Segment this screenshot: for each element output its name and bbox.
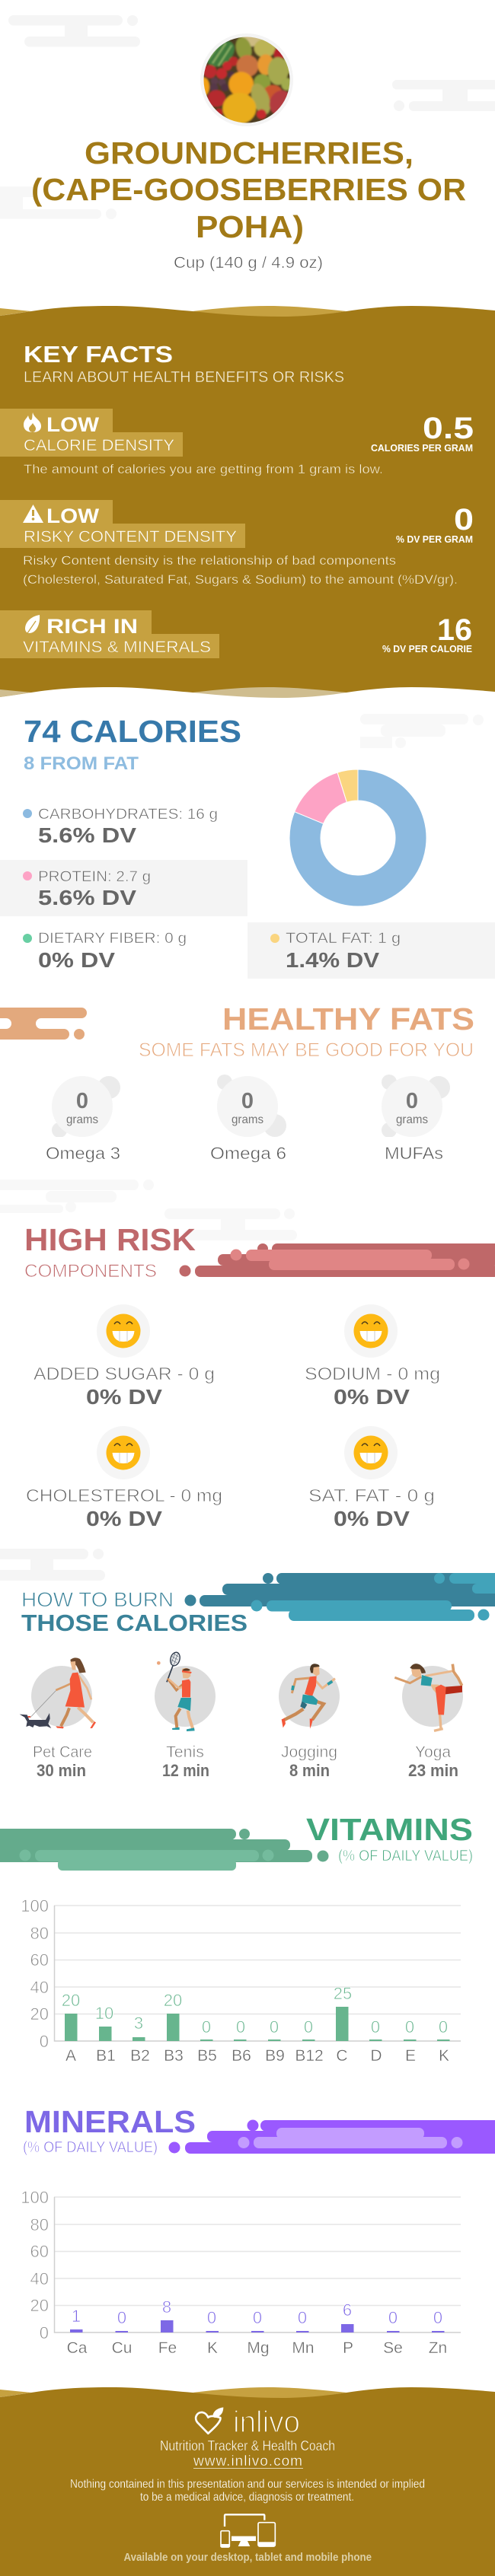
stat: omega 3	[46, 1076, 120, 1163]
bar chart: vitamins: 0	[439, 2017, 448, 2036]
bar chart: minerals: K	[207, 2339, 218, 2357]
item: saturated fat	[308, 1426, 435, 1530]
bar chart: vitamins: B2	[130, 2047, 150, 2065]
activity: jogging: 8 min	[289, 1761, 330, 1780]
serving size: Cup (140 g / 4.9 oz)	[174, 254, 323, 272]
bar chart: minerals: 6	[343, 2301, 352, 2320]
item: cholesterol	[26, 1426, 222, 1530]
donut chart	[289, 769, 426, 906]
bar chart: minerals: 0	[388, 2308, 398, 2327]
title: POHA)	[196, 209, 304, 244]
bar chart: vitamins: B1	[96, 2047, 116, 2065]
icon: tennis player	[157, 1651, 195, 1731]
bar chart: vitamins: 60	[30, 1950, 49, 1969]
fact: rich in vitamins and minerals: % DV PER CALORIE	[382, 643, 472, 654]
bar chart: minerals: 0	[207, 2308, 216, 2327]
bar chart: vitamins: 0	[202, 2017, 211, 2036]
fact: rich in vitamins and minerals	[0, 610, 472, 658]
icon: grinning face	[353, 1435, 388, 1470]
fact: risky content density: % DV PER GRAM	[396, 533, 473, 545]
fact: calorie density: LOW	[46, 413, 100, 436]
nutrient: total fat	[248, 922, 495, 979]
nutrient: carbohydrates	[23, 807, 218, 847]
activity: pet care	[20, 1657, 96, 1780]
bar chart: minerals: 8	[162, 2297, 171, 2316]
activity: tennis	[155, 1651, 216, 1780]
stat: mufas: MUFAs	[385, 1144, 443, 1163]
fact: calorie density: 0.5	[423, 412, 474, 445]
disclaimer: to be a medical advice, diagnosis or treatment.	[140, 2491, 354, 2504]
heading: those calories: THOSE CALORIES	[21, 1610, 248, 1636]
bar chart: minerals: P	[343, 2339, 353, 2357]
icon: yoga pose	[394, 1664, 462, 1731]
heading: key facts: KEY FACTS	[24, 341, 173, 368]
activity: jogging: Jogging	[281, 1743, 337, 1761]
stat: omega 3: Omega 3	[46, 1144, 120, 1163]
bar chart: vitamins	[21, 1896, 461, 2065]
icon: grinning face	[353, 1313, 388, 1348]
heading: how to burn: HOW TO BURN	[21, 1588, 174, 1611]
bar chart: minerals: Fe	[158, 2339, 177, 2357]
subheading: healthy fats: SOME FATS MAY BE GOOD FOR YOU	[139, 1040, 474, 1061]
background cloud: above high risk	[0, 1180, 297, 1240]
icon: grinning face	[107, 1313, 140, 1348]
bar chart: minerals: 100	[21, 2188, 49, 2207]
activity: pet care: Pet Care	[33, 1743, 92, 1761]
nutrient: carbohydrates: CARBOHYDRATES: 16 g	[38, 807, 218, 823]
bar chart: vitamins: D	[370, 2047, 382, 2065]
heading: calories: 74 CALORIES	[24, 714, 241, 749]
decoration: minerals pills	[169, 2120, 495, 2154]
bar chart: vitamins: 20	[30, 2004, 49, 2024]
background cloud: top right	[392, 80, 495, 111]
activity: yoga: 23 min	[408, 1761, 458, 1780]
bar chart: vitamins: 100	[21, 1896, 49, 1915]
bar chart: vitamins: 20	[164, 1991, 182, 2010]
subheading: key facts: LEARN ABOUT HEALTH BENEFITS OR RISKS	[24, 369, 344, 386]
activity: tennis: 12 min	[162, 1761, 209, 1780]
bar chart: vitamins: B12	[295, 2047, 324, 2065]
subheading: components: COMPONENTS	[24, 1261, 157, 1282]
panel: vitamins	[0, 1812, 473, 2065]
nutrient: total fat: TOTAL FAT: 1 g	[286, 931, 401, 947]
subheading: percent of daily value: (% OF DAILY VALUE)	[23, 2139, 158, 2156]
title: GROUNDCHERRIES,	[85, 135, 414, 170]
bar chart: minerals	[21, 2188, 461, 2357]
bar chart: minerals: 1	[72, 2307, 81, 2326]
item: added sugar: 0% DV	[86, 1385, 162, 1409]
fact: calorie density: The amount of calories you are getting from 1 gram is low.	[24, 462, 383, 476]
item: sodium: SODIUM - 0 mg	[305, 1364, 440, 1384]
bar chart: vitamins: B5	[197, 2047, 217, 2065]
bar chart: vitamins: K	[439, 2047, 449, 2065]
icon: warning triangle	[23, 505, 43, 523]
heading: high risk: HIGH RISK	[24, 1222, 196, 1257]
bar chart: vitamins: E	[405, 2047, 416, 2065]
nutrient: dietary fiber: 0% DV	[38, 948, 115, 972]
icon: leaf	[25, 615, 40, 633]
panel: how to burn calories	[20, 1573, 495, 1780]
title	[31, 135, 466, 244]
bar chart: minerals: 0	[253, 2308, 262, 2327]
icon: devices	[221, 2514, 275, 2547]
stat: mufas	[382, 1075, 450, 1163]
stat: mufas: grams	[396, 1113, 428, 1126]
panel: footer	[0, 2387, 495, 2576]
fact: rich in vitamins and minerals: RICH IN	[46, 615, 138, 638]
bar chart: minerals: 0	[433, 2308, 442, 2327]
bar chart: vitamins: 3	[134, 2014, 143, 2033]
nutrient: dietary fiber: DIETARY FIBER: 0 g	[38, 931, 187, 947]
item: sodium	[305, 1304, 440, 1409]
icon: woman walking dog	[20, 1657, 96, 1728]
item: saturated fat: 0% DV	[334, 1507, 410, 1530]
website link: www.inlivo.com	[193, 2453, 302, 2469]
food photo	[198, 33, 295, 127]
decoration: burn pills	[184, 1573, 495, 1621]
panel: high risk components	[24, 1222, 495, 1530]
bar chart: minerals: Zn	[429, 2339, 447, 2357]
fact: risky content density: (Cholesterol, Saturated Fat, Sugars & Sodium) to the amount (%DV/gr).	[23, 572, 458, 587]
wave: top of footer	[0, 2387, 495, 2409]
bar chart: vitamins: 0	[270, 2017, 279, 2036]
fact: risky content density: RISKY CONTENT DENSITY	[24, 528, 237, 546]
bar chart: vitamins: 25	[334, 1984, 352, 2003]
bar chart: minerals: 40	[30, 2269, 49, 2288]
bar chart: minerals: 60	[30, 2242, 49, 2261]
bar chart: vitamins: B9	[265, 2047, 285, 2065]
heading: vitamins: VITAMINS	[306, 1812, 473, 1847]
nutrient: protein: PROTEIN: 2.7 g	[38, 869, 151, 885]
decoration: high risk pills	[180, 1243, 495, 1277]
activity: pet care: 30 min	[37, 1761, 86, 1780]
subheading: percent of daily value: (% OF DAILY VALUE)	[338, 1848, 473, 1864]
item: saturated fat: SAT. FAT - 0 g	[308, 1485, 435, 1505]
activity: yoga	[394, 1664, 463, 1780]
heading: minerals: MINERALS	[24, 2104, 196, 2139]
stat: omega 6	[210, 1075, 286, 1163]
bar chart: minerals: 0	[117, 2308, 126, 2327]
heading: healthy fats: HEALTHY FATS	[222, 1001, 474, 1036]
bar chart: vitamins: C	[336, 2047, 348, 2065]
background cloud: calories	[360, 714, 484, 748]
stat: omega 6: 0	[241, 1089, 254, 1113]
nutrient: carbohydrates: 5.6% DV	[38, 823, 136, 847]
bar chart: minerals: 0	[298, 2308, 307, 2327]
item: sodium: 0% DV	[334, 1385, 410, 1409]
nutrient: protein	[0, 860, 248, 916]
nutrient: total fat: 1.4% DV	[286, 948, 379, 972]
fact: calorie density: CALORIE DENSITY	[24, 437, 174, 454]
bar chart: vitamins: A	[65, 2047, 76, 2065]
activity: tennis: Tenis	[166, 1743, 204, 1761]
bar chart: minerals: 20	[30, 2296, 49, 2315]
bar chart: minerals: 80	[30, 2215, 49, 2234]
bar chart: minerals: Se	[383, 2339, 403, 2357]
stat: omega 3: 0	[76, 1089, 88, 1113]
nutrient: dietary fiber	[23, 931, 187, 972]
bar chart: vitamins: 0	[236, 2017, 245, 2036]
icon: flame	[24, 412, 41, 432]
bar chart: minerals: 0	[40, 2323, 49, 2342]
fact: calorie density	[0, 409, 474, 476]
stat: omega 6: Omega 6	[210, 1144, 286, 1163]
fact: risky content density: 0	[454, 503, 474, 537]
stat: omega 6: grams	[232, 1113, 263, 1126]
item: added sugar	[34, 1304, 215, 1409]
panel: healthy fats	[0, 1001, 474, 1163]
tagline: Nutrition Tracker & Health Coach	[160, 2438, 335, 2453]
icon: jogger	[282, 1664, 335, 1729]
bar chart: vitamins: 0	[40, 2032, 49, 2051]
item: added sugar: ADDED SUGAR - 0 g	[34, 1364, 215, 1384]
fact: rich in vitamins and minerals: 16	[437, 613, 472, 647]
bar chart: vitamins: 10	[95, 2004, 113, 2023]
background cloud: top left	[8, 15, 140, 47]
icon: grinning face	[107, 1435, 140, 1470]
activity: yoga: Yoga	[415, 1743, 451, 1761]
subheading: calories from fat: 8 FROM FAT	[24, 753, 139, 774]
wave: top of key facts	[0, 306, 495, 327]
fact: calorie density: CALORIES PER GRAM	[371, 442, 473, 454]
item: cholesterol: 0% DV	[86, 1507, 162, 1530]
background cloud: above burn section	[0, 1549, 105, 1581]
title: (CAPE-GOOSEBERRIES OR	[31, 172, 466, 207]
panel: calories	[0, 714, 495, 979]
disclaimer	[70, 2478, 425, 2504]
fact: risky content density	[0, 500, 474, 587]
fact: rich in vitamins and minerals: VITAMINS & MINERALS	[23, 638, 211, 656]
bar chart: vitamins: B3	[164, 2047, 184, 2065]
availability note: Available on your desktop, tablet and mobile phone	[123, 2551, 372, 2564]
background cloud: behind title	[0, 186, 117, 219]
logo: inlivo: inlivo	[233, 2406, 300, 2439]
bar chart: minerals: Ca	[67, 2339, 88, 2357]
bar chart: vitamins: 20	[62, 1991, 80, 2010]
stat: omega 3: grams	[66, 1113, 98, 1126]
fact: risky content density: LOW	[46, 505, 100, 527]
decoration: healthy fats pills	[0, 1008, 87, 1040]
bar chart: minerals: Mg	[247, 2339, 270, 2357]
bar chart: vitamins: 0	[405, 2017, 414, 2036]
panel: minerals	[21, 2104, 495, 2357]
bar chart: vitamins: 0	[304, 2017, 313, 2036]
nutrient: protein: 5.6% DV	[38, 886, 136, 909]
bar chart: minerals: Mn	[292, 2339, 315, 2357]
item: cholesterol: CHOLESTEROL - 0 mg	[26, 1485, 222, 1505]
activity: jogging	[279, 1664, 340, 1780]
decoration: vitamins pills	[0, 1829, 329, 1871]
bar chart: vitamins: 80	[30, 1924, 49, 1943]
bar chart: vitamins: B6	[232, 2047, 251, 2065]
bar chart: minerals: Cu	[112, 2339, 132, 2357]
disclaimer: Nothing contained in this presentation and our services is intended or implied	[70, 2478, 425, 2491]
panel: key facts	[0, 306, 495, 712]
stat: mufas: 0	[406, 1089, 418, 1113]
fact: risky content density: Risky Content density is the relationship of bad components	[23, 553, 396, 568]
bar chart: vitamins: 40	[30, 1978, 49, 1997]
bar chart: vitamins: 0	[371, 2017, 380, 2036]
wave: bottom of key facts	[0, 687, 495, 712]
logo: inlivo	[196, 2406, 300, 2439]
